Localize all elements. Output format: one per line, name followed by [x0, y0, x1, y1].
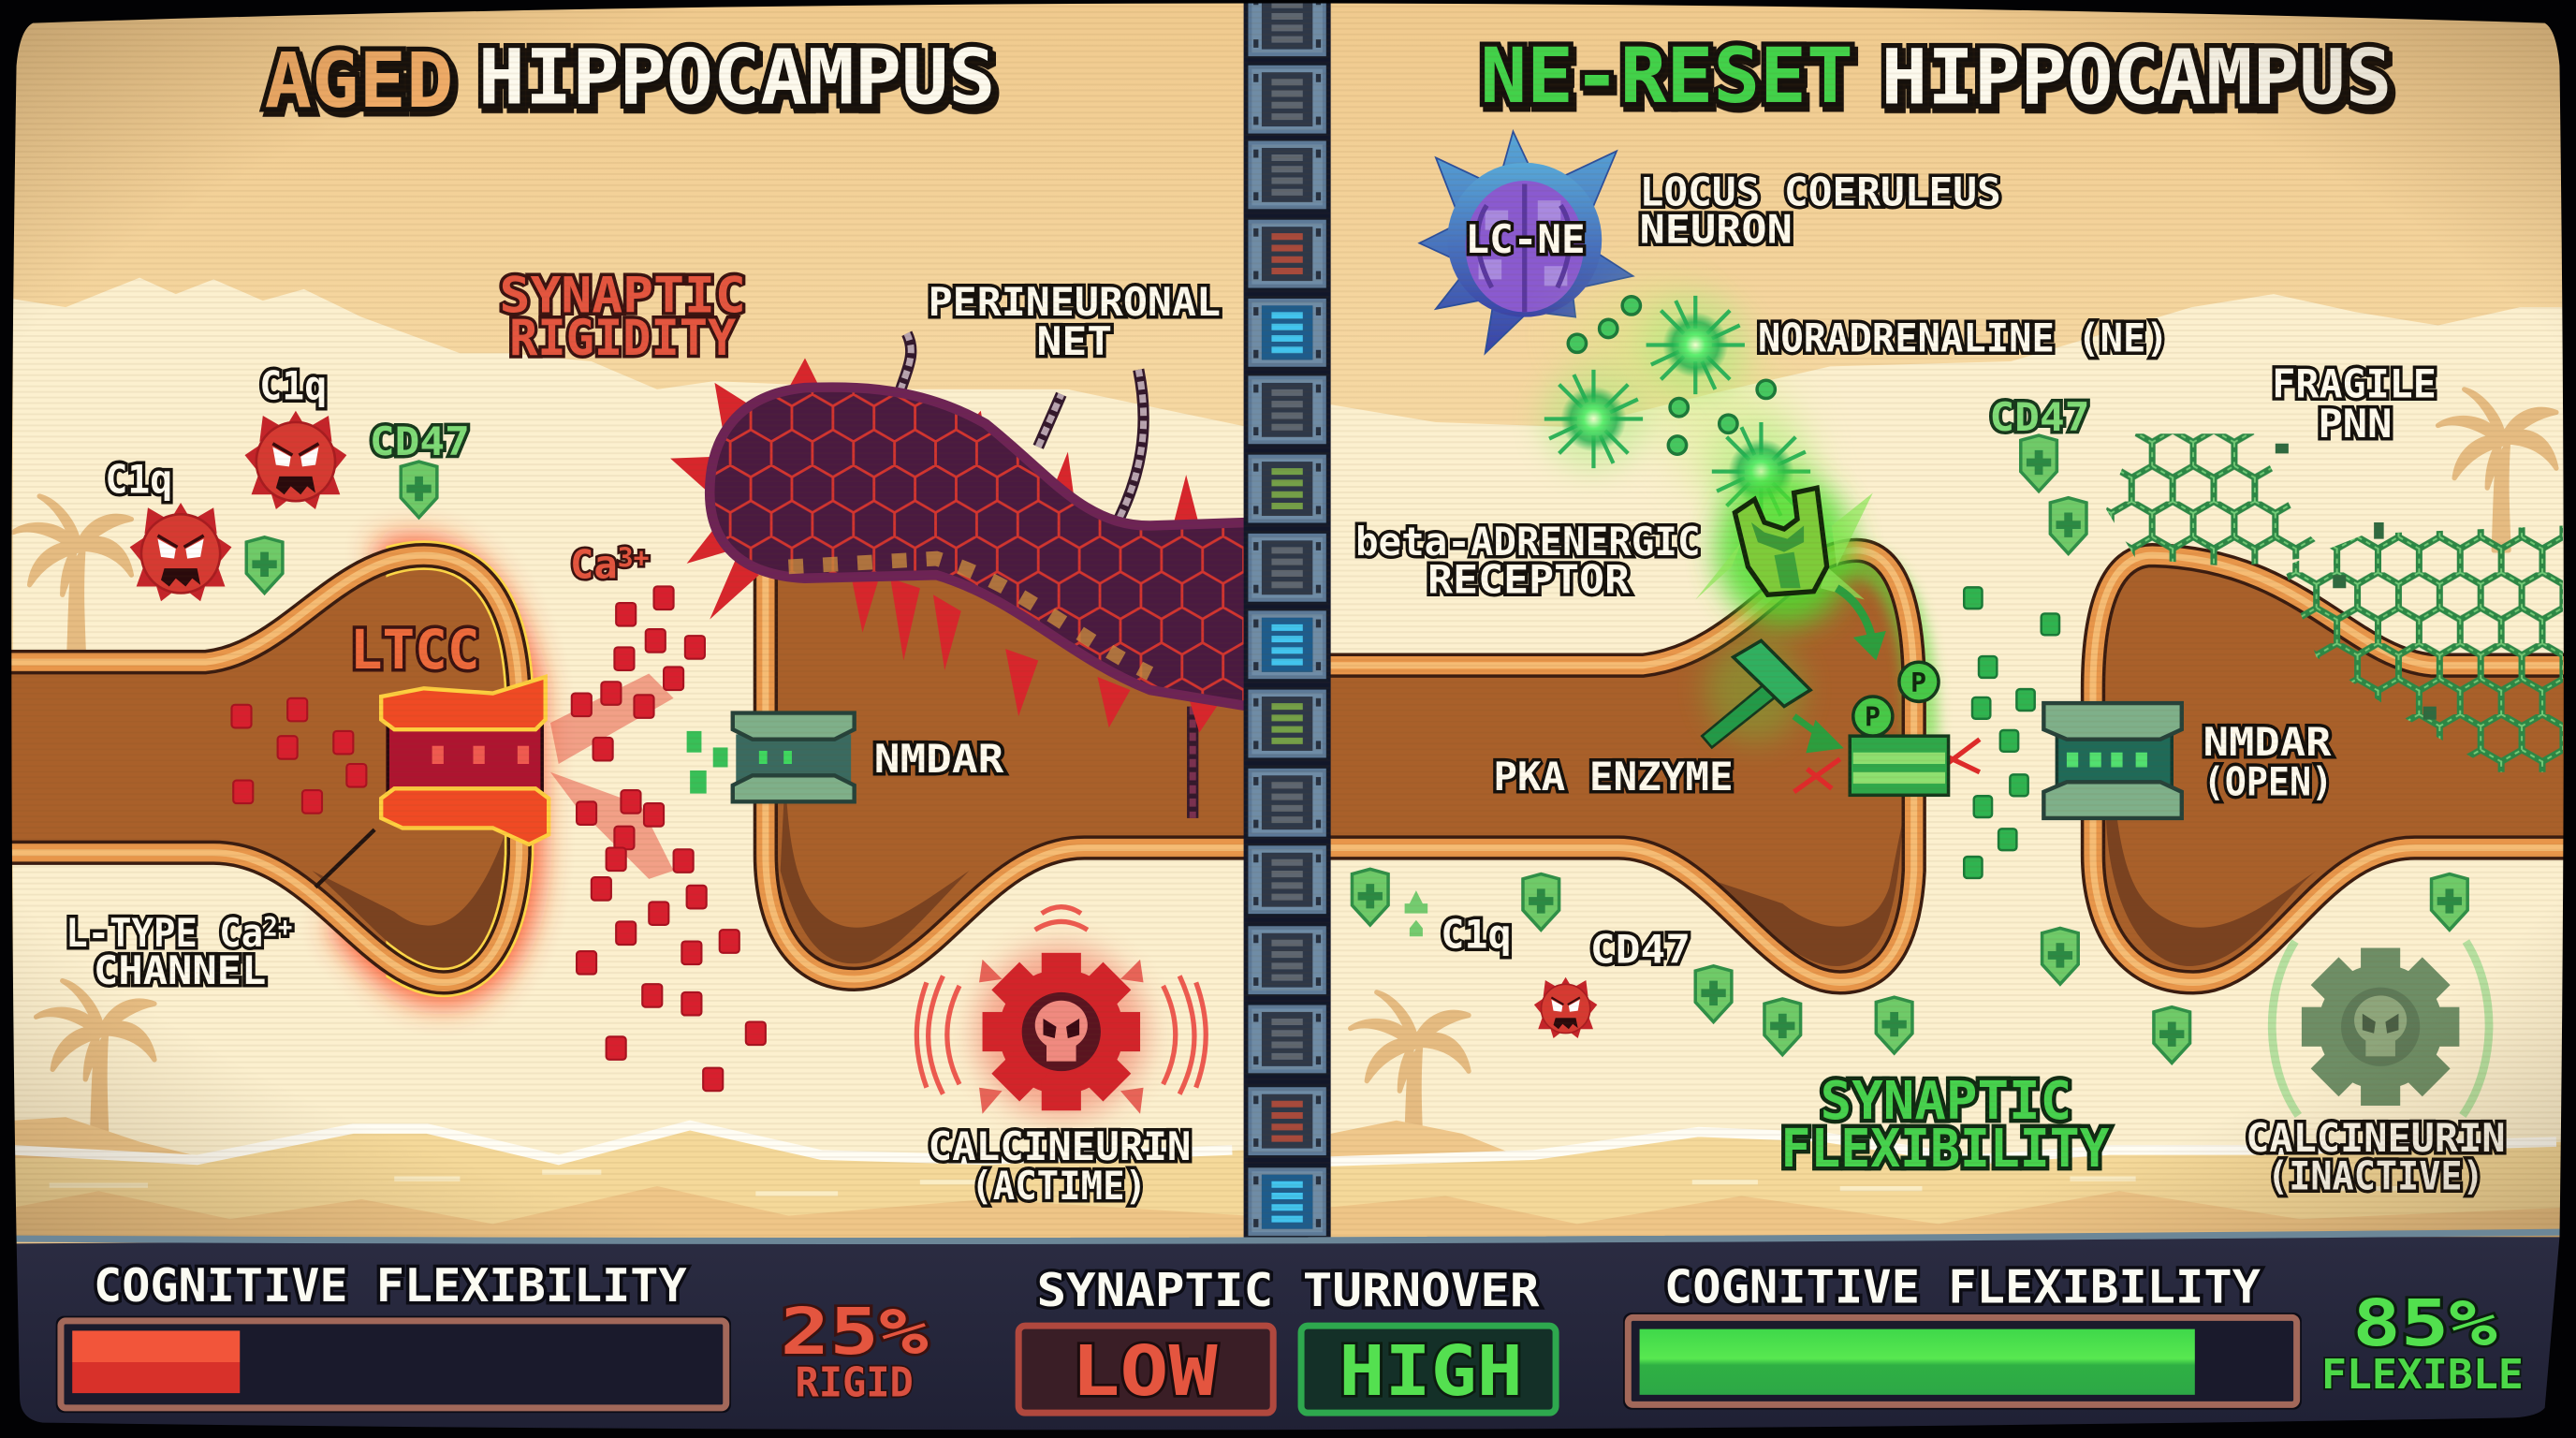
label: calcineurin inactive	[2246, 1115, 2506, 1198]
label: perineuronal net	[929, 279, 1221, 364]
label: NMDAR open: NMDAR	[2203, 719, 2332, 765]
palm tree lower right scene	[1351, 992, 1469, 1153]
low indicator: LOW	[1071, 1332, 1218, 1412]
icon: PKA hammer	[1702, 638, 1837, 749]
label: beta-adrenergic receptor: beta-ADRENERGIC	[1355, 519, 1701, 565]
panel: center divider column	[1244, 0, 1331, 1249]
label: perineuronal net: PERINEURONAL	[929, 279, 1221, 325]
NMDAR receptor open	[2043, 703, 2182, 818]
left readout 25 percent rigid: RIGID	[795, 1359, 914, 1407]
icon: noradrenaline star 2	[1541, 366, 1647, 472]
shoreline foam	[1327, 1132, 2556, 1162]
label: fragile PNN	[2272, 361, 2437, 447]
presynaptic terminal	[0, 555, 520, 982]
icon: C1q lower	[130, 503, 231, 601]
heading: aged hippocampus: HIPPOCAMPUS	[478, 35, 996, 123]
L-type calcium channel	[315, 677, 549, 888]
noradrenaline vesicles	[1568, 297, 1775, 454]
right readout 85 percent flexible: 85%	[2352, 1286, 2497, 1361]
label: CD47: CD47	[370, 418, 470, 464]
label: C1q upper: C1q	[259, 362, 327, 408]
glutamate particles in cleft	[1964, 587, 2059, 878]
low indicator	[1018, 1326, 1273, 1413]
icon: C1q upper	[245, 411, 346, 509]
NMDAR receptor closed	[687, 713, 855, 801]
label: fragile PNN: FRAGILE	[2272, 361, 2437, 407]
label: CD47 white: CD47	[1590, 926, 1690, 972]
label: LC-NE: LC-NE	[1466, 216, 1586, 262]
right flexibility label: COGNITIVE FLEXIBILITY	[1664, 1260, 2261, 1314]
label: synaptic flexibility: FLEXIBILITY	[1781, 1119, 2110, 1180]
turnover heading: SYNAPTIC TURNOVER	[1036, 1263, 1540, 1317]
label: C1q lower: C1q	[105, 456, 172, 502]
label: NMDAR open: (OPEN)	[2203, 758, 2333, 804]
label: calcineurin inactive: CALCINEURIN	[2246, 1115, 2506, 1161]
background clouds	[1327, 294, 2566, 1249]
label: perineuronal net: NET	[1036, 318, 1112, 364]
arrow: receptor to kinase	[1837, 588, 1886, 660]
presynaptic terminal	[1314, 550, 1922, 982]
label: synaptic flexibility	[1781, 1071, 2110, 1180]
left flexibility bar	[57, 1317, 729, 1411]
label: L-type Ca channel: 2+	[263, 912, 292, 943]
heading: NE-reset hippocampus: NE-RESET	[1480, 33, 1853, 121]
label: Ca2+: 3+	[618, 542, 650, 573]
label: locus coeruleus neuron: LOCUS COERULEUS	[1640, 169, 2001, 214]
background clouds	[13, 278, 1249, 1249]
label: L-type Ca channel: L-TYPE Ca	[66, 910, 279, 956]
heading: NE-reset hippocampus	[1480, 33, 2392, 123]
left readout 25 percent rigid	[781, 1295, 929, 1407]
calcium ion burst in cleft	[550, 586, 766, 1091]
right readout 85 percent flexible: FLEXIBLE	[2321, 1351, 2524, 1399]
label: LTCC: LTCC	[350, 618, 479, 682]
label: beta-adrenergic receptor: RECEPTOR	[1427, 556, 1631, 602]
palm tree upper left	[13, 496, 131, 657]
left flexibility label: COGNITIVE FLEXIBILITY	[94, 1258, 687, 1313]
icon: noradrenaline star 3	[1708, 418, 1814, 524]
icons: CD47 shields	[1352, 435, 2467, 1063]
label: noradrenaline: NORADRENALINE (NE)	[1758, 315, 2169, 361]
label: calcineurin active: (ACTIME)	[971, 1163, 1147, 1209]
label: synaptic flexibility: SYNAPTIC	[1821, 1071, 2071, 1132]
icon: small C1q fragments	[1405, 890, 1427, 936]
right readout 85 percent flexible	[2321, 1286, 2524, 1399]
icon: LC-NE neuron	[1419, 131, 1633, 353]
icon: phosphate P badges: P	[1910, 668, 1926, 698]
label: PKA enzyme: PKA ENZYME	[1493, 754, 1734, 800]
right flexibility bar	[1625, 1314, 2300, 1408]
postsynaptic spine	[766, 559, 1265, 979]
label: calcineurin active: CALCINEURIN	[929, 1123, 1191, 1169]
label: synaptic rigidity: RIGIDITY	[509, 310, 737, 367]
palm tree upper right	[2438, 389, 2556, 550]
heading: aged hippocampus: AGED	[265, 37, 453, 125]
label: NMDAR open	[2203, 719, 2333, 804]
panel: aged hippocampus scene	[0, 0, 1265, 1249]
left readout 25 percent rigid: 25%	[781, 1295, 929, 1370]
icon: calcineurin inactive gear	[2272, 942, 2489, 1116]
label: calcineurin active	[929, 1123, 1191, 1209]
label: beta-adrenergic receptor	[1355, 519, 1701, 602]
label: NMDAR: NMDAR	[874, 736, 1004, 782]
calcium ions in terminal	[231, 698, 366, 814]
icon: small C1q	[1534, 977, 1597, 1038]
high indicator: HIGH	[1339, 1332, 1523, 1412]
high indicator	[1301, 1326, 1556, 1413]
label: fragile PNN: PNN	[2318, 401, 2392, 447]
fragile PNN lattice	[2106, 433, 2563, 772]
beach sand	[1327, 1132, 2566, 1249]
label: C1q: C1q	[1441, 912, 1512, 958]
heading: NE-reset hippocampus: HIPPOCAMPUS	[1881, 35, 2392, 123]
label: locus coeruleus neuron	[1640, 169, 2001, 253]
icon: phosphate P badges	[1853, 662, 1939, 736]
label: locus coeruleus neuron: NEURON	[1640, 207, 1793, 253]
icon: phosphorylated channel	[1794, 736, 1980, 795]
palm tree lower left	[37, 981, 154, 1142]
label: L-type Ca channel	[66, 910, 292, 993]
icon: noradrenaline star 1	[1643, 292, 1748, 398]
calcium glow around presynaptic terminal	[345, 560, 520, 982]
beach sand	[13, 1125, 1249, 1249]
label: calcineurin inactive: (INACTIVE)	[2267, 1152, 2484, 1198]
icon: calcineurin active gear	[916, 907, 1206, 1117]
noradrenaline glow	[1560, 279, 1823, 526]
icon: CD47 shield lower	[246, 537, 283, 593]
perineuronal net	[670, 333, 1249, 818]
heading: aged hippocampus	[265, 35, 996, 125]
icon: phosphate P badges: P	[1865, 702, 1881, 733]
icon: CD47 shield upper	[401, 462, 437, 518]
panel: status HUD	[10, 1232, 2566, 1437]
label: L-type Ca channel: CHANNEL	[94, 947, 266, 993]
panel: NE-reset hippocampus scene	[1314, 0, 2576, 1249]
label: synaptic rigidity: SYNAPTIC	[500, 267, 746, 324]
label: Ca2+: Ca	[570, 542, 618, 588]
label: synaptic rigidity	[500, 267, 746, 367]
postsynaptic spine	[2093, 555, 2576, 982]
icon: beta adrenergic receptor	[1695, 475, 1873, 626]
label: CD47: CD47	[1989, 394, 2089, 440]
shoreline foam	[13, 1125, 1232, 1160]
